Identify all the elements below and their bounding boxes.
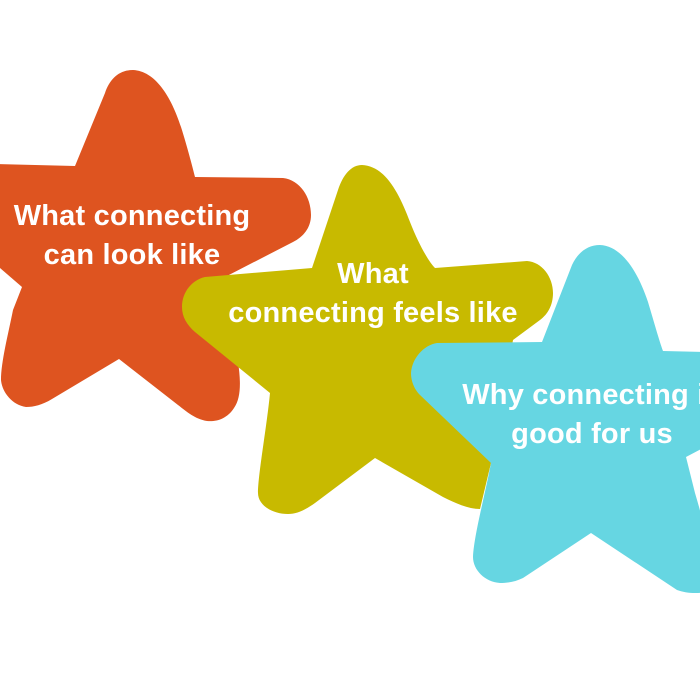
olive star label: What	[337, 258, 409, 290]
star: cyan, why connecting is good for us	[411, 245, 700, 593]
cyan star label line 2: good for us	[511, 418, 673, 450]
star: orange, what connecting can look like	[0, 70, 311, 421]
olive star shape	[182, 165, 553, 514]
orange star shape	[0, 70, 311, 421]
olive star label line 2: connecting feels like	[228, 297, 518, 329]
star: olive, what connecting feels like	[182, 165, 553, 514]
orange star label: What connecting	[14, 200, 250, 232]
orange star label line 2: can look like	[44, 239, 220, 271]
cyan star shape	[411, 245, 700, 593]
